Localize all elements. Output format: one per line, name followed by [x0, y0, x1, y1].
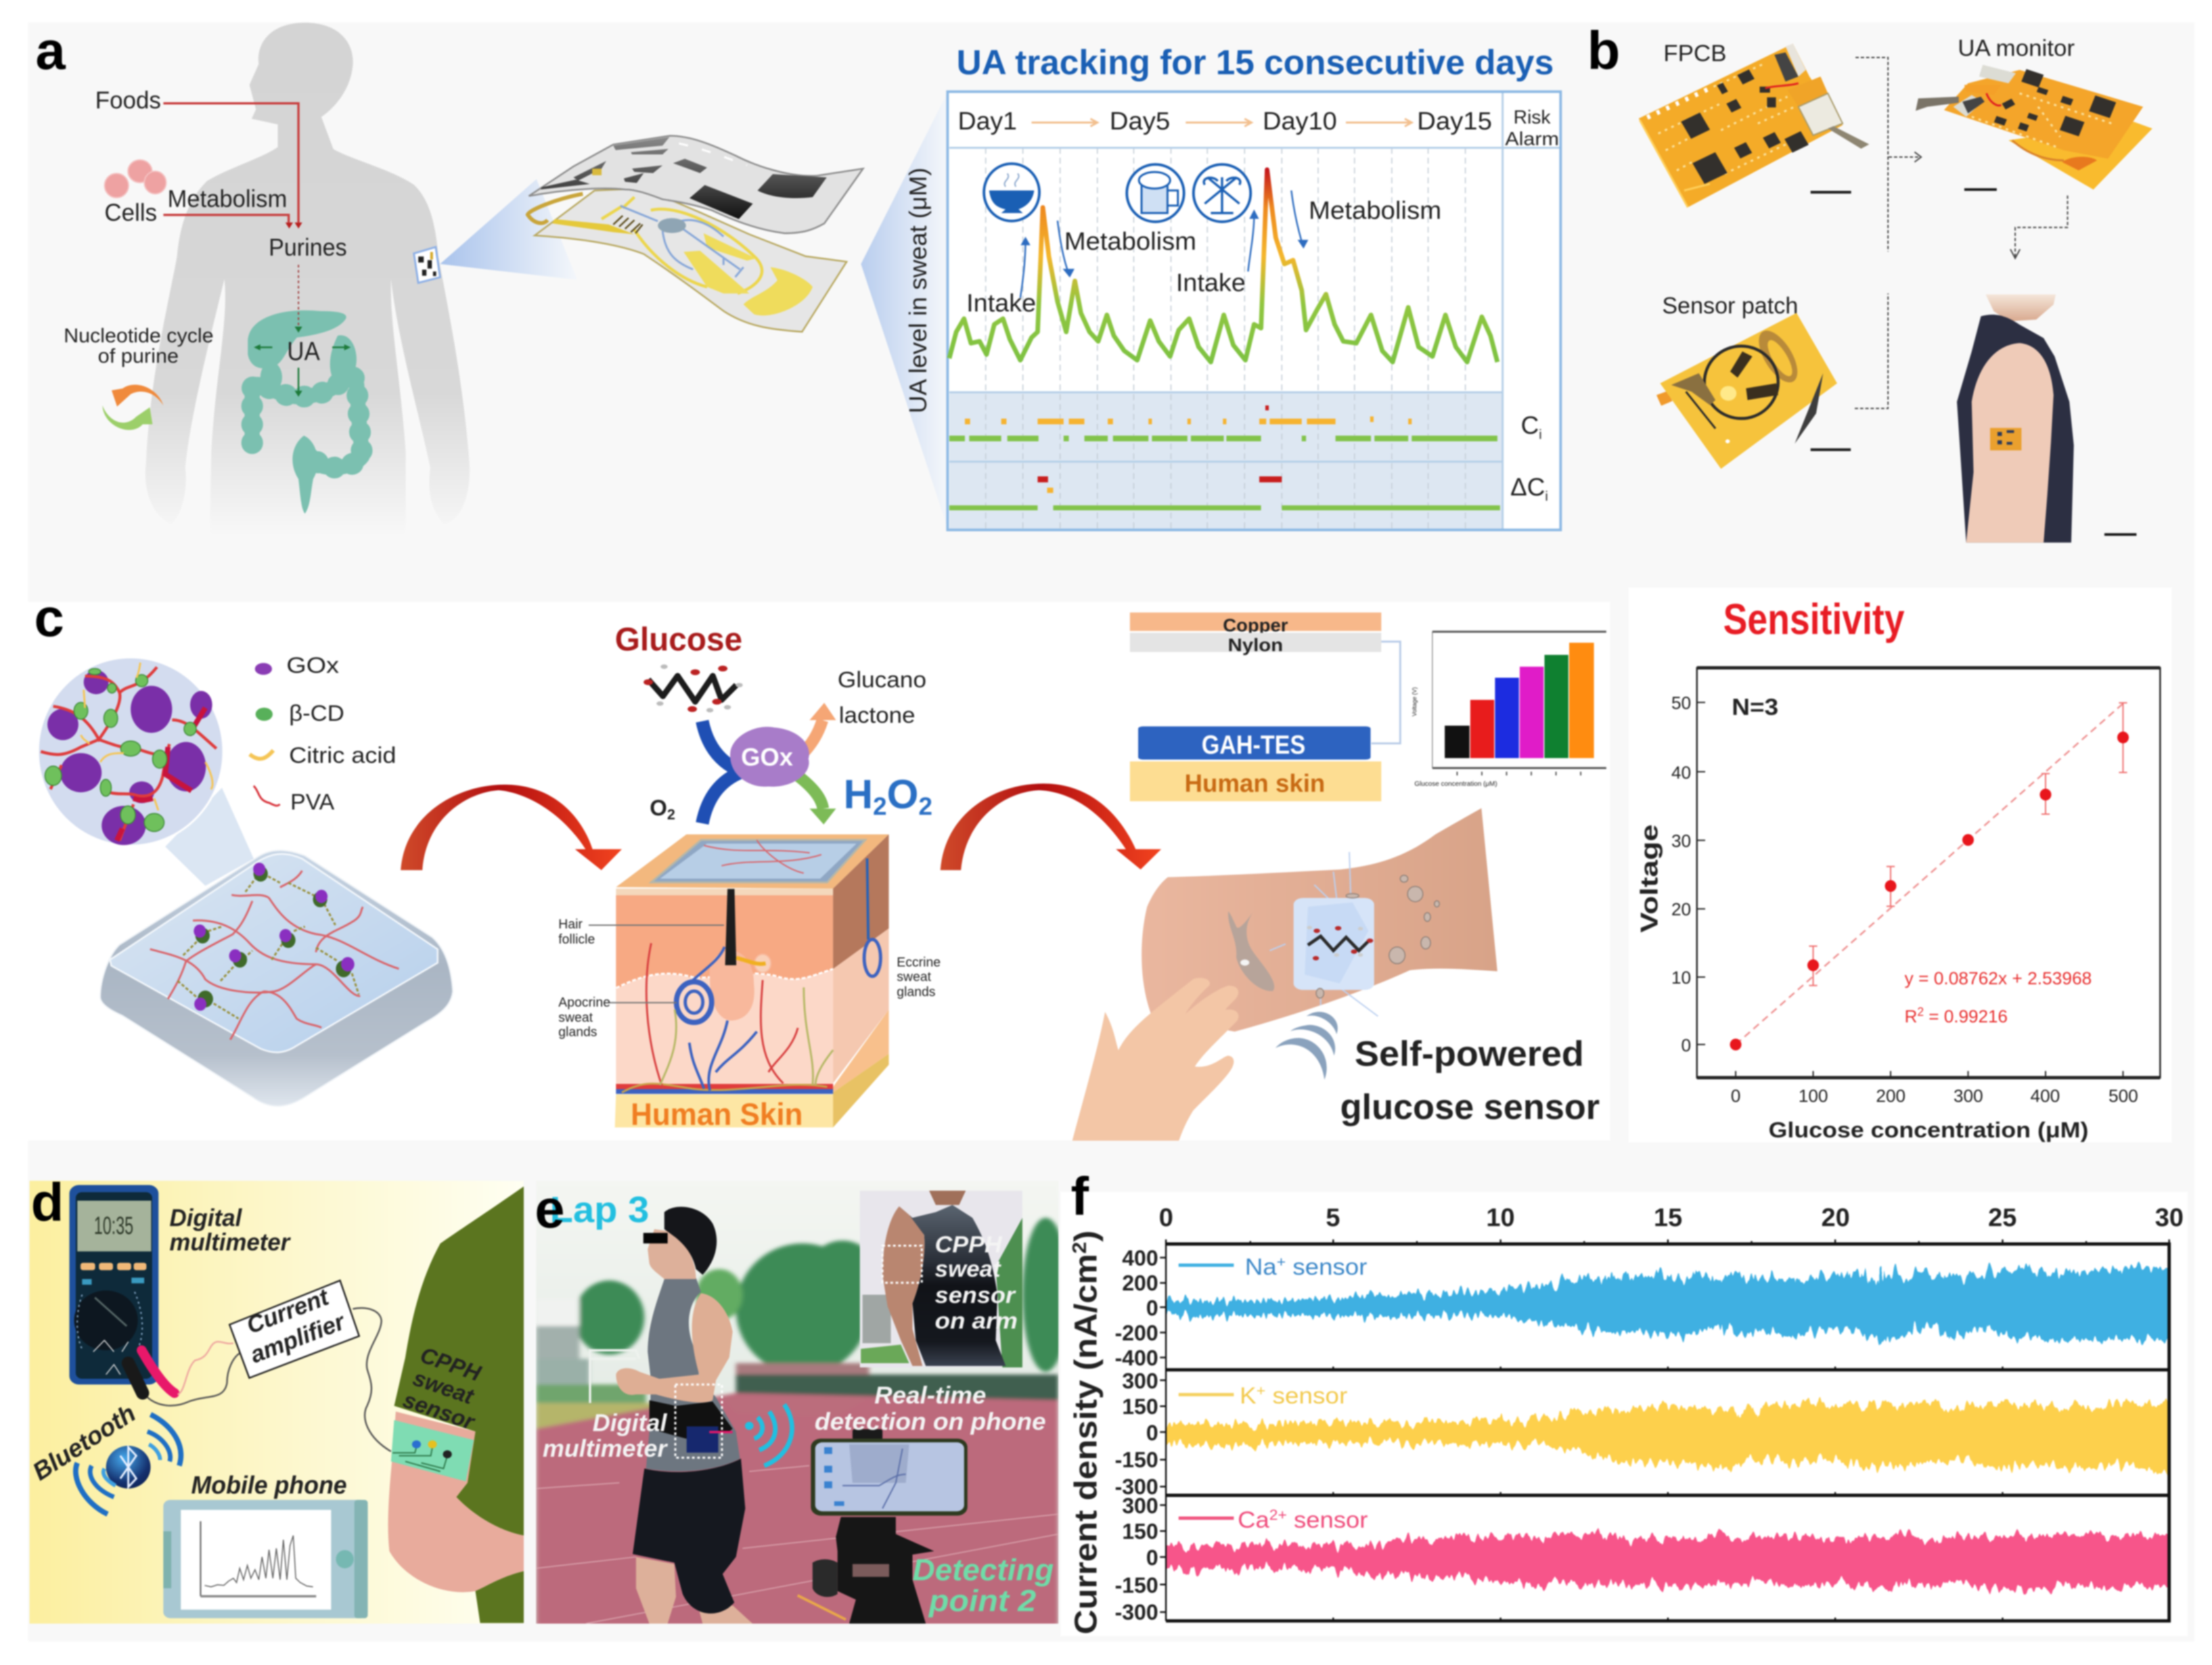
label: Digital multimeter on photo: multimeter	[543, 1435, 669, 1462]
panel letter f: f	[1071, 1167, 1089, 1227]
y axis label: UA level in sweat (μM)	[905, 168, 932, 413]
y axis tick labels: -400	[1115, 1346, 1158, 1370]
trend line and data points	[1730, 703, 2129, 1051]
photo: sensor patch	[1656, 313, 1837, 468]
mini chart: voltage bars: Voltage (V)	[1411, 687, 1418, 716]
day labels: Day15	[1417, 108, 1492, 135]
label: Bluetooth: Bluetooth	[28, 1400, 141, 1486]
label: Hair follicle	[558, 917, 724, 947]
panel letter c: c	[34, 588, 64, 648]
plot frame and ticks	[1697, 668, 2160, 1078]
label: Self-powered glucose sensor: glucose sensor	[1340, 1087, 1600, 1127]
label: Current amplifier	[242, 1283, 350, 1368]
label: Ci: C	[1521, 412, 1539, 440]
top axis labels: 20	[1821, 1204, 1850, 1232]
y axis tick labels: 30	[1671, 831, 1691, 851]
legend: Ca2+ sensor: sensor	[1287, 1507, 1368, 1533]
label: N=3: N=3	[1732, 695, 1778, 720]
legend: Citric acid	[250, 743, 396, 768]
trace: K+ sensor	[1158, 1382, 2180, 1478]
y axis tick labels: 0	[1146, 1296, 1158, 1320]
inset label: CPPH sweat sensor on arm	[935, 1232, 1018, 1334]
y axis tick labels: 10	[1671, 968, 1691, 988]
cone from device to chart	[861, 93, 947, 528]
icon: Bluetooth signal	[76, 1415, 181, 1514]
y axis tick labels: 0	[1146, 1421, 1158, 1445]
label: Digital multimeter	[169, 1204, 292, 1256]
y axis tick labels: 200	[1122, 1271, 1158, 1295]
legend: Na+ sensor	[1179, 1254, 1367, 1280]
arm with green shirt	[388, 1187, 524, 1623]
legend: beta-CD	[256, 701, 344, 726]
label: Eccrine sweat glands: sweat	[897, 970, 932, 984]
label: Apocrine sweat glands: sweat	[558, 1011, 593, 1025]
hydrogel network close-up	[38, 658, 223, 846]
y axis tick labels: 0	[1681, 1036, 1691, 1055]
y axis tick labels: -200	[1115, 1321, 1158, 1345]
label: Risk Alarm	[1505, 107, 1559, 150]
trace: Ca2+ sensor	[1158, 1507, 2180, 1589]
icon: nucleotide cycle arrows	[102, 385, 164, 430]
flow dashed arrows	[1855, 57, 2067, 409]
label: H2O2: H	[844, 772, 873, 817]
label: Detecting point 2: point 2	[928, 1584, 1036, 1618]
label: Risk Alarm: Alarm	[1505, 129, 1559, 150]
inset label: CPPH sweat sensor on arm: sweat	[935, 1256, 1001, 1282]
layer: GAH-TES: GAH-TES	[1202, 731, 1305, 760]
photo: FPCB board	[1638, 44, 1869, 208]
flow arrows to purines	[164, 103, 351, 397]
panel letter e: e	[535, 1179, 565, 1239]
panel f: current density traces	[1060, 1167, 2188, 1636]
title: UA tracking: UA tracking for 15 consecutive days	[957, 43, 1554, 82]
y axis tick labels: 300	[1122, 1369, 1158, 1393]
y axis tick labels: 50	[1671, 693, 1691, 713]
label: Detecting point 2	[913, 1553, 1054, 1618]
y axis tick labels	[1115, 1246, 1158, 1624]
legend: GOx: GOx	[286, 653, 339, 678]
label: CPPH sweat sensor: sweat	[410, 1365, 478, 1409]
legend: PVA	[254, 786, 334, 815]
label: Metabolism: Metabolism	[168, 185, 287, 212]
connector to mini chart	[1371, 641, 1400, 743]
label: Glucose: Glucose	[615, 621, 742, 658]
icon: seafood	[1194, 164, 1251, 222]
photo: UA monitor	[1916, 65, 2152, 189]
day arrows	[1031, 119, 1412, 126]
label: Hair follicle: Hair	[558, 917, 583, 932]
panel c: self-powered glucose sensor	[34, 588, 1606, 1141]
panel letter b: b	[1587, 21, 1620, 81]
label: Eccrine sweat glands	[897, 955, 941, 999]
x axis title: Glucose concentration (μM)	[1769, 1118, 2088, 1142]
label: Current amplifier: Current	[242, 1283, 333, 1339]
layer: Human skin	[1130, 762, 1382, 801]
legend: PVA: PVA	[290, 790, 334, 815]
label: Hair follicle: follicle	[558, 932, 595, 947]
y axis tick labels: 150	[1122, 1519, 1158, 1543]
runner	[616, 1207, 753, 1624]
layer: Copper	[1130, 612, 1382, 635]
skin cross-section block	[615, 834, 889, 1128]
layer: Nylon: Nylon	[1228, 635, 1283, 655]
y axis tick labels: -300	[1115, 1474, 1158, 1499]
y axis tick labels	[1671, 693, 1691, 1055]
icon: digital multimeter	[70, 1185, 175, 1393]
chart annotations: Intake	[1176, 269, 1246, 297]
zoom cone to hydrogel	[166, 788, 254, 886]
inset label: CPPH sweat sensor on arm: CPPH	[935, 1232, 1003, 1258]
arrow: skin to arm	[940, 783, 1162, 870]
small sensor on arm	[414, 247, 440, 283]
zoom beam to device	[440, 179, 577, 280]
label: Glucano lactone: Glucano	[838, 668, 926, 693]
panel d background	[30, 1181, 524, 1624]
label: Glucano lactone: lactone	[839, 703, 915, 728]
x axis tick labels: 400	[2030, 1086, 2060, 1106]
forearm with sensor patch	[1142, 808, 1497, 1032]
running track scene	[536, 1181, 1069, 1628]
equation: y = 0.08762x + 2.53968	[1905, 969, 2092, 988]
label: Digital multimeter: Digital	[169, 1204, 242, 1231]
photo: sensor on arm	[1957, 294, 2074, 543]
legend: Na+ sensor: sensor	[1286, 1254, 1367, 1280]
y axis tick labels: -150	[1115, 1573, 1158, 1597]
label: Self-powered glucose sensor: Self-powered	[1355, 1034, 1584, 1074]
label: O2: O	[650, 796, 667, 821]
label: H2O2: 2	[873, 793, 887, 821]
x axis tick labels: 200	[1876, 1086, 1906, 1106]
chart frame and grid	[947, 91, 1560, 530]
legend: Ca2+ sensor: 2+	[1269, 1507, 1287, 1523]
legend: GOx	[255, 653, 339, 678]
trace: Na+ sensor	[1158, 1254, 2180, 1342]
label: Detecting point 2: Detecting	[913, 1553, 1054, 1587]
panel: sensitivity background	[1629, 587, 2172, 1143]
y axis title: 2	[1069, 1242, 1091, 1254]
arrow: hydrogel to skin	[401, 785, 622, 870]
chart annotations	[966, 197, 1441, 317]
chart annotations: Metabolism	[1309, 197, 1441, 225]
legend	[250, 653, 396, 815]
hand	[1072, 978, 1238, 1141]
layer: Nylon	[1130, 633, 1382, 655]
panel d: measurement setup	[28, 1173, 524, 1624]
y axis tick labels: 400	[1122, 1246, 1158, 1270]
legend: Ca2+ sensor: Ca	[1238, 1507, 1267, 1533]
UA concentration trace	[949, 170, 1497, 362]
label: O2: 2	[667, 806, 675, 823]
legend: Na+ sensor: Na	[1245, 1254, 1275, 1280]
chart annotations: Metabolism	[1064, 228, 1196, 256]
icon: food bowl	[984, 164, 1039, 221]
label: Lap 3: Lap 3	[550, 1189, 649, 1230]
mini chart: voltage bars	[1411, 631, 1606, 788]
organs: liver, kidneys and intestine	[248, 310, 362, 514]
layer: GAH-TES	[1138, 727, 1370, 760]
legend: Ca2+ sensor	[1179, 1507, 1368, 1533]
label: Digital multimeter: multimeter	[169, 1229, 292, 1256]
current amplifier box	[229, 1281, 359, 1378]
y axis tick labels: 40	[1671, 763, 1691, 783]
x axis tick labels: 500	[2108, 1086, 2138, 1106]
mobile phone with signal plot	[164, 1500, 368, 1618]
label: Cells: Cells	[104, 199, 157, 226]
label: CPPH sweat sensor	[400, 1342, 485, 1435]
icon: cells	[104, 160, 166, 198]
top axis labels: 5	[1326, 1204, 1340, 1232]
top axis labels: 30	[2155, 1204, 2184, 1232]
legend: Citric acid: Citric acid	[289, 743, 396, 768]
y axis tick labels: 300	[1122, 1494, 1158, 1518]
label: Eccrine sweat glands: Eccrine	[897, 955, 941, 970]
label: Ci: i	[1539, 428, 1542, 442]
wires	[147, 1308, 391, 1451]
day labels: Day1	[958, 108, 1017, 135]
legend: K+ sensor	[1179, 1382, 1347, 1409]
label: FPCB: FPCB	[1663, 41, 1727, 66]
equation: = 0.99216	[1924, 1007, 2008, 1026]
label: Nucleotide cycle of purine: Nucleotide cycle	[64, 324, 214, 347]
y axis tick labels: 0	[1146, 1545, 1158, 1570]
panel letter a: a	[35, 21, 66, 81]
phone on tripod	[811, 1429, 968, 1624]
label: H2O2: 2	[918, 793, 932, 821]
legend: Na+ sensor: +	[1276, 1254, 1286, 1270]
label: Apocrine sweat glands: Apocrine	[558, 995, 610, 1010]
heading: Sensitivity: Sensitivity	[1723, 595, 1905, 643]
equation: R	[1905, 1007, 1917, 1026]
y axis tick labels: 150	[1122, 1394, 1158, 1419]
chart annotations: Intake	[966, 290, 1036, 317]
label: Digital multimeter on photo	[543, 1409, 669, 1462]
label: Risk Alarm: Risk	[1514, 107, 1551, 128]
panel letter d: d	[31, 1173, 64, 1233]
label: Self-powered glucose sensor	[1340, 1034, 1600, 1127]
label: Eccrine sweat glands: glands	[897, 985, 936, 999]
y axis tick labels: -150	[1115, 1448, 1158, 1472]
y axis title: Voltage	[1636, 824, 1663, 933]
hydrogel block	[101, 850, 453, 1106]
mini chart: voltage bars: Glucose concentration (μM)	[1414, 781, 1497, 788]
top axis labels: 15	[1654, 1204, 1682, 1232]
label: Human Skin: Human Skin	[631, 1097, 803, 1131]
label: Real-time detection on phone: Real-time	[874, 1382, 986, 1409]
label: Digital multimeter on photo: Digital	[593, 1409, 667, 1436]
y axis title: )	[1069, 1230, 1104, 1242]
equation: 2	[1917, 1005, 1924, 1018]
panel: sensitivity chart	[1636, 595, 2160, 1142]
flexible device exploded view	[528, 136, 863, 332]
panel c: glucose sensor background	[28, 602, 1610, 1141]
legend: beta-CD: β-CD	[289, 701, 344, 726]
label: Apocrine sweat glands	[558, 995, 677, 1039]
enzyme reaction diagram	[702, 703, 836, 825]
human body silhouette	[145, 22, 470, 536]
label: Purines: Purines	[269, 234, 347, 261]
y axis title: Current density (nA/cm	[1069, 1286, 1104, 1635]
scale bars	[1811, 188, 2136, 536]
layer: Copper: Copper	[1223, 615, 1288, 635]
equation	[1905, 969, 2092, 1026]
molecule: glucose	[644, 664, 743, 712]
icon: beer mug	[1127, 164, 1184, 222]
top axis labels: 0	[1159, 1204, 1173, 1232]
delta Ci risk bars	[949, 476, 1500, 511]
legend: K+ sensor: K	[1240, 1383, 1255, 1409]
inset: sensor on arm	[860, 1191, 1022, 1367]
label: Real-time detection on phone	[815, 1382, 1046, 1435]
Ci risk bars	[949, 405, 1497, 442]
label: Real-time detection on phone: detection on phone	[815, 1408, 1046, 1435]
label: Mobile phone: Mobile phone	[191, 1472, 347, 1499]
top axis labels: 25	[1988, 1204, 2017, 1232]
top axis labels: 10	[1486, 1204, 1515, 1232]
x axis tick labels: 0	[1730, 1086, 1741, 1106]
label: UA monitor: UA monitor	[1958, 35, 2075, 61]
icon: wireless signal	[747, 1404, 792, 1466]
label: Glucano lactone	[838, 668, 926, 728]
multimeter display reading: 10:35	[94, 1212, 133, 1240]
inset label: CPPH sweat sensor on arm: sensor	[935, 1283, 1017, 1308]
icon: vibration waves	[1275, 1012, 1338, 1080]
label: UA: UA	[287, 337, 320, 366]
label: delta Ci: ΔC	[1510, 474, 1545, 501]
label: Apocrine sweat glands: glands	[558, 1025, 597, 1039]
x axis tick labels	[1730, 1086, 2138, 1106]
label: CPPH sweat sensor: sensor	[400, 1387, 478, 1435]
plot frame and ticks	[1160, 1239, 2169, 1621]
label: delta Ci: i	[1545, 490, 1548, 504]
day labels: Day5	[1110, 108, 1170, 135]
top axis labels	[1159, 1204, 2184, 1232]
layer stack	[1130, 612, 1382, 801]
x axis tick labels: 300	[1953, 1086, 1983, 1106]
x axis tick labels: 100	[1798, 1086, 1828, 1106]
panel b: device photos	[1587, 21, 2152, 543]
day labels: Day10	[1263, 108, 1337, 135]
label: CPPH sweat sensor: CPPH	[417, 1342, 485, 1386]
label: Sensor patch: Sensor patch	[1662, 293, 1798, 319]
y axis tick labels: -300	[1115, 1600, 1158, 1624]
layer: Human skin: Human skin	[1185, 770, 1325, 798]
label: GOx on enzyme: GOx	[741, 744, 793, 771]
y axis tick labels: 20	[1671, 900, 1691, 919]
label: Nucleotide cycle of purine	[64, 324, 214, 367]
inset label: CPPH sweat sensor on arm: on arm	[935, 1308, 1018, 1334]
label: Nucleotide cycle of purine: of purine	[98, 344, 179, 367]
panel f background	[1060, 1192, 2188, 1636]
chart: UA level over 15 days	[905, 91, 1560, 530]
label: Current amplifier: amplifier	[246, 1308, 350, 1368]
day labels	[958, 108, 1492, 135]
intake and metabolism arrows	[1020, 191, 1307, 298]
legend: K+ sensor: sensor	[1265, 1383, 1347, 1409]
label: H2O2: O	[887, 772, 918, 817]
legend: K+ sensor: +	[1256, 1382, 1265, 1399]
label: Foods: Foods	[95, 87, 161, 114]
panel e: running test photo	[535, 1179, 1069, 1628]
panel a: uric acid monitoring	[35, 21, 1560, 536]
